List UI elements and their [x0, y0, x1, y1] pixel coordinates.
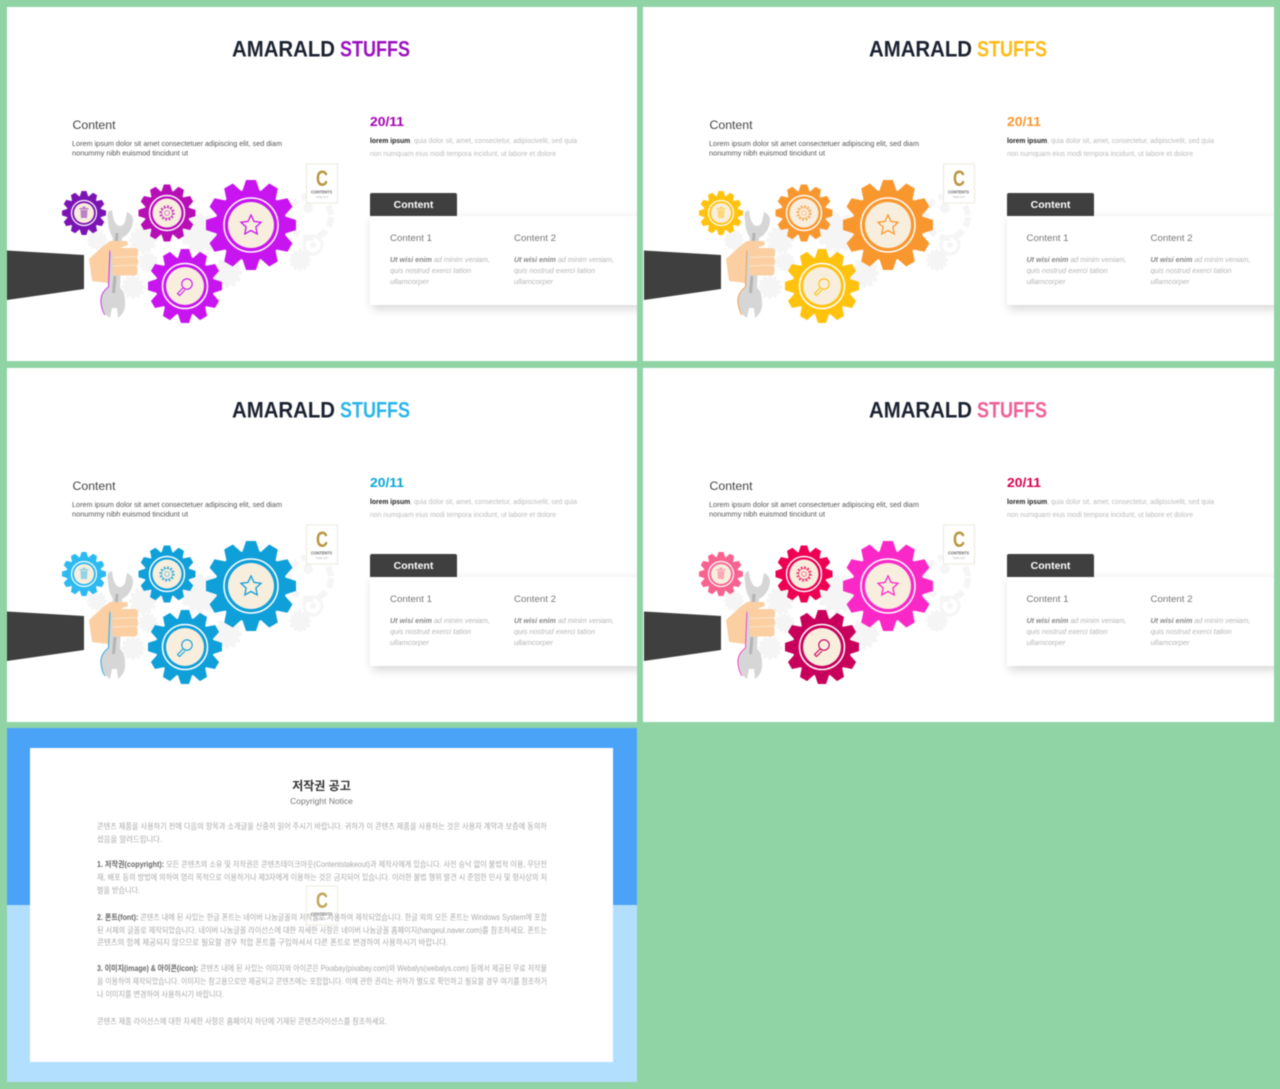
description — [1007, 138, 1214, 158]
panel: purple slide — [7, 7, 642, 361]
card with tab: Content 1 — [1026, 233, 1068, 243]
card with tab — [370, 554, 642, 670]
card with tab: ullamcorper — [1150, 277, 1190, 286]
title: AMARALD — [232, 398, 335, 422]
card with tab: ullamcorper — [1150, 638, 1190, 647]
card with tab: ullamcorper — [390, 638, 430, 647]
card with tab: Content — [394, 560, 434, 572]
left text block — [72, 118, 282, 158]
left text block: nonummy nibh euismod tincidunt ut — [72, 148, 188, 158]
card with tab: quis nostrud exerci tation — [514, 266, 595, 275]
card with tab: Ut wisi enim ad minim veniam, — [1026, 616, 1126, 625]
card with tab: Content 1 — [390, 594, 432, 604]
card with tab — [1007, 554, 1279, 670]
logo stamp — [306, 525, 338, 564]
card with tab: quis nostrud exerci tation — [1026, 627, 1108, 636]
card with tab: quis nostrud exerci tation — [514, 627, 595, 636]
illustration: hand, wrench and gears — [7, 541, 331, 684]
description: non numquam eius modi tempora incidunt, ut labore et dolore — [1007, 151, 1193, 158]
logo stamp — [306, 164, 338, 203]
notice body text: 나 이미지를 변경하여 사용하시기 바랍니다. — [97, 989, 224, 999]
card with tab: Content — [1031, 199, 1071, 211]
title: STUFFS — [977, 36, 1047, 62]
left text block: Content — [72, 118, 116, 132]
logo stamp — [944, 164, 974, 203]
logo stamp — [944, 525, 974, 564]
card with tab: Ut wisi enim ad minim veniam, — [1150, 616, 1250, 625]
title: STUFFS — [977, 398, 1047, 422]
card with tab: Content 2 — [1150, 233, 1192, 243]
left text block: Lorem ipsum dolor sit amet consectetuer adipiscing elit, sed diam — [709, 500, 919, 509]
description: non numquam eius modi tempora incidunt, ut labore et dolore — [370, 151, 556, 158]
card with tab: Content 2 — [514, 233, 556, 243]
left text block: Content — [710, 118, 753, 132]
left text block: nonummy nibh euismod tincidunt ut — [709, 510, 825, 518]
date heading: 20/11 — [370, 115, 404, 129]
left text block: nonummy nibh euismod tincidunt ut — [72, 510, 188, 518]
card with tab: Content 2 — [514, 594, 556, 604]
card with tab: quis nostrud exerci tation — [390, 266, 471, 275]
description — [1007, 499, 1214, 519]
description: non numquam eius modi tempora incidunt, ut labore et dolore — [370, 512, 556, 519]
card with tab: quis nostrud exerci tation — [1026, 266, 1108, 275]
card with tab: Ut wisi enim ad minim veniam, — [390, 616, 490, 625]
left text block — [72, 479, 282, 518]
panel: blue slide — [7, 368, 642, 722]
title — [232, 36, 410, 62]
description: lorem ipsum, quia dolor sit, amet, consectetur, adipiscivelit, sed quia — [370, 499, 577, 506]
left text block — [709, 118, 919, 158]
illustration: hand, wrench and gears — [644, 180, 968, 323]
description: lorem ipsum, quia dolor sit, amet, consectetur, adipiscivelit, sed quia — [1007, 138, 1214, 145]
card with tab: ullamcorper — [1026, 277, 1066, 286]
card with tab: Content 2 — [1150, 594, 1192, 604]
title: AMARALD — [869, 398, 972, 422]
title: STUFFS — [340, 398, 410, 422]
left text block — [709, 479, 919, 518]
left text block: Content — [710, 479, 753, 493]
notice body text: 콘텐츠의 함께 제공되지 않으므로 필요할 경우 적합 폰트를 구입하셔서 다른 폰트로 변경하여 사용하시기 바랍니다. — [97, 937, 448, 947]
notice body text: 을 이용하여 제작되었습니다. 이미지는 참고용으로만 제공되고 콘텐츠에는 포함합니다. 이에 관한 권리는 귀하가 별도로 확인하고 필요할 경우 여기를 참조하거 — [97, 976, 547, 986]
date heading: 20/11 — [1007, 115, 1041, 129]
title — [232, 398, 410, 422]
left text block: nonummy nibh euismod tincidunt ut — [709, 148, 825, 158]
notice body text: 된 서체의 글꼴로 제작되었습니다. 네이버 나눔글꼴 라이선스에 대한 자세한 사항은 네이버 나눔글꼴 홈페이지(hangeul.naver.com)를 참조하세요. 폰트는 — [97, 925, 547, 935]
title — [869, 36, 1047, 62]
card with tab: ullamcorper — [514, 277, 554, 286]
notice body text — [97, 821, 548, 1026]
panel: amber slide — [643, 7, 1279, 361]
logo stamp — [306, 886, 338, 925]
title — [869, 398, 1047, 422]
notice body text: 셨음을 알려드립니다. — [97, 834, 162, 844]
title: AMARALD — [869, 36, 972, 62]
notice body text: 콘텐츠 제품 라이선스에 대한 자세한 사항은 홈페이지 하단에 기재된 콘텐츠라이선스를 참조하세요. — [97, 1016, 387, 1026]
illustration: hand, wrench and gears — [644, 541, 968, 684]
notice body text: 재, 배포 등의 방법에 의하여 영리 목적으로 이용하거나 제3자에게 이용하는 것은 금지되어 있습니다. 이러한 불법 행위 발견 시 준엄한 민사 및 형사상의 처 — [97, 872, 547, 882]
description — [370, 138, 577, 158]
card with tab: Content 1 — [390, 233, 432, 243]
card with tab: quis nostrud exerci tation — [1150, 266, 1232, 275]
left text block: Content — [72, 479, 116, 493]
card with tab: ullamcorper — [1026, 638, 1066, 647]
card with tab — [370, 193, 642, 309]
card with tab: quis nostrud exerci tation — [390, 627, 471, 636]
card with tab: ullamcorper — [514, 638, 554, 647]
notice body text: 1. 저작권(copyright): 모든 콘텐츠의 소유 및 저작권은 콘텐츠테이크아웃(Contentstakeout)과 제작사에게 있습니다. 사전 승낙 없이 불법적 이용, 무단전 — [97, 859, 547, 869]
card with tab — [1007, 193, 1279, 309]
card with tab: Ut wisi enim ad minim veniam, — [390, 255, 490, 264]
notice body text: 2. 폰트(font): 콘텐츠 내에 된 사있는 한글 폰트는 네이버 나눔글꼴의 저작물로 사용하여 제작되었습니다. 한글 외의 모든 폰트는 Windows System에 포함 — [97, 912, 548, 922]
notice body text: 벌을 받습니다. — [97, 885, 140, 895]
card with tab: Ut wisi enim ad minim veniam, — [514, 616, 614, 625]
notice heading — [290, 778, 353, 806]
notice heading: 저작권 공고 — [292, 778, 351, 793]
description: lorem ipsum, quia dolor sit, amet, consectetur, adipiscivelit, sed quia — [370, 138, 577, 145]
left text block: Lorem ipsum dolor sit amet consectetuer adipiscing elit, sed diam — [72, 500, 282, 509]
left text block: Lorem ipsum dolor sit amet consectetuer adipiscing elit, sed diam — [709, 139, 919, 148]
left text block: Lorem ipsum dolor sit amet consectetuer adipiscing elit, sed diam — [72, 139, 282, 148]
illustration: hand, wrench and gears — [7, 180, 331, 323]
panel: copyright notice — [7, 728, 637, 1082]
title: AMARALD — [232, 36, 335, 62]
description: non numquam eius modi tempora incidunt, ut labore et dolore — [1007, 512, 1193, 519]
description: lorem ipsum, quia dolor sit, amet, consectetur, adipiscivelit, sed quia — [1007, 499, 1214, 506]
notice heading: Copyright Notice — [290, 796, 353, 806]
card with tab: Content — [394, 199, 434, 211]
title: STUFFS — [340, 36, 410, 62]
card with tab: quis nostrud exerci tation — [1150, 627, 1232, 636]
panel: pink slide — [643, 368, 1279, 722]
notice body text: 콘텐츠 제품을 사용하기 전에 다음의 항목과 소개글을 신중히 읽어 주시기 바랍니다. 귀하가 이 콘텐츠 제품을 사용하는 것은 사용자 계약과 보증에 동의하 — [97, 821, 548, 831]
card with tab: Ut wisi enim ad minim veniam, — [1150, 255, 1250, 264]
card with tab: Content 1 — [1026, 594, 1068, 604]
card with tab: Content — [1031, 560, 1071, 572]
notice body text: 3. 이미지(image) & 아이콘(icon): 콘텐츠 내에 된 사있는 이미지와 아이콘은 Pixabay(pixabay.com)와 Webalys(webalys.com) 등에서 제공된 무료 저작물 — [97, 963, 547, 973]
date heading: 20/11 — [370, 476, 404, 490]
card with tab: ullamcorper — [390, 277, 430, 286]
date heading: 20/11 — [1007, 476, 1041, 490]
card with tab: Ut wisi enim ad minim veniam, — [1026, 255, 1126, 264]
description — [370, 499, 577, 519]
card with tab: Ut wisi enim ad minim veniam, — [514, 255, 614, 264]
